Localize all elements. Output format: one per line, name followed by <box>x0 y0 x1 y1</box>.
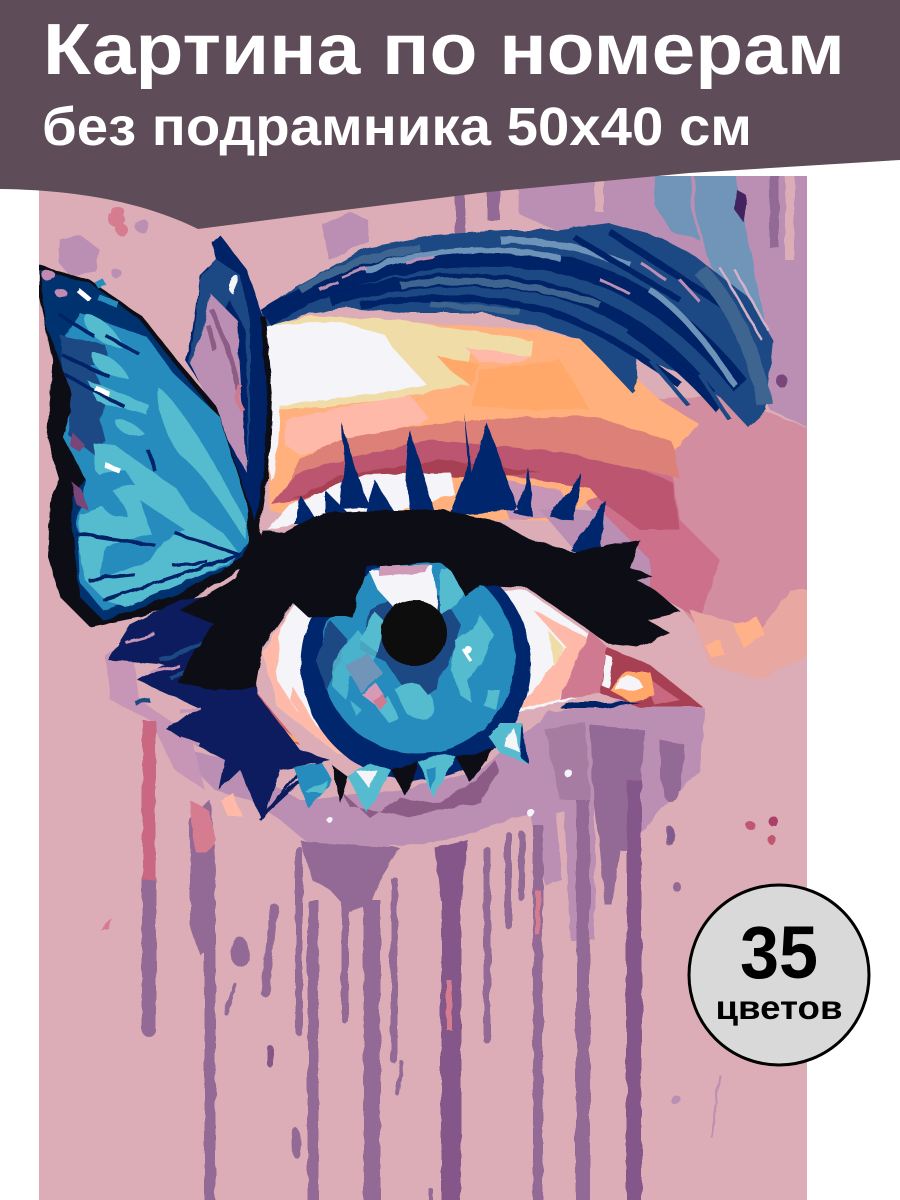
sclera <box>263 590 607 763</box>
title: Картина по номерам <box>43 10 845 90</box>
lash mass <box>178 510 681 690</box>
upper right paint wash <box>58 170 815 430</box>
paint drips <box>149 722 720 1200</box>
red drip and splatter <box>100 720 779 1030</box>
front butterfly wing <box>39 265 262 627</box>
catchlight <box>370 565 438 616</box>
iris <box>301 550 531 780</box>
pupil <box>381 600 447 666</box>
left lilac splash <box>105 640 205 790</box>
lower left lashes <box>108 590 330 820</box>
top banner <box>0 0 900 229</box>
upper lash spikes <box>294 414 640 553</box>
lilac tear pool <box>170 700 705 848</box>
badge: colour count <box>689 885 869 1065</box>
eyeshadow <box>264 316 815 680</box>
subtitle: без подрамника 50х40 см <box>42 97 752 157</box>
badge: colour count: 35 <box>740 911 818 994</box>
painting: eye and butterfly <box>39 170 815 1200</box>
rear butterfly wing <box>185 235 270 530</box>
eyebrow <box>262 223 773 427</box>
badge: colour count: цветов <box>716 989 842 1026</box>
eye <box>108 413 703 820</box>
teal tear spikes <box>293 723 528 818</box>
painting background <box>39 176 807 1200</box>
